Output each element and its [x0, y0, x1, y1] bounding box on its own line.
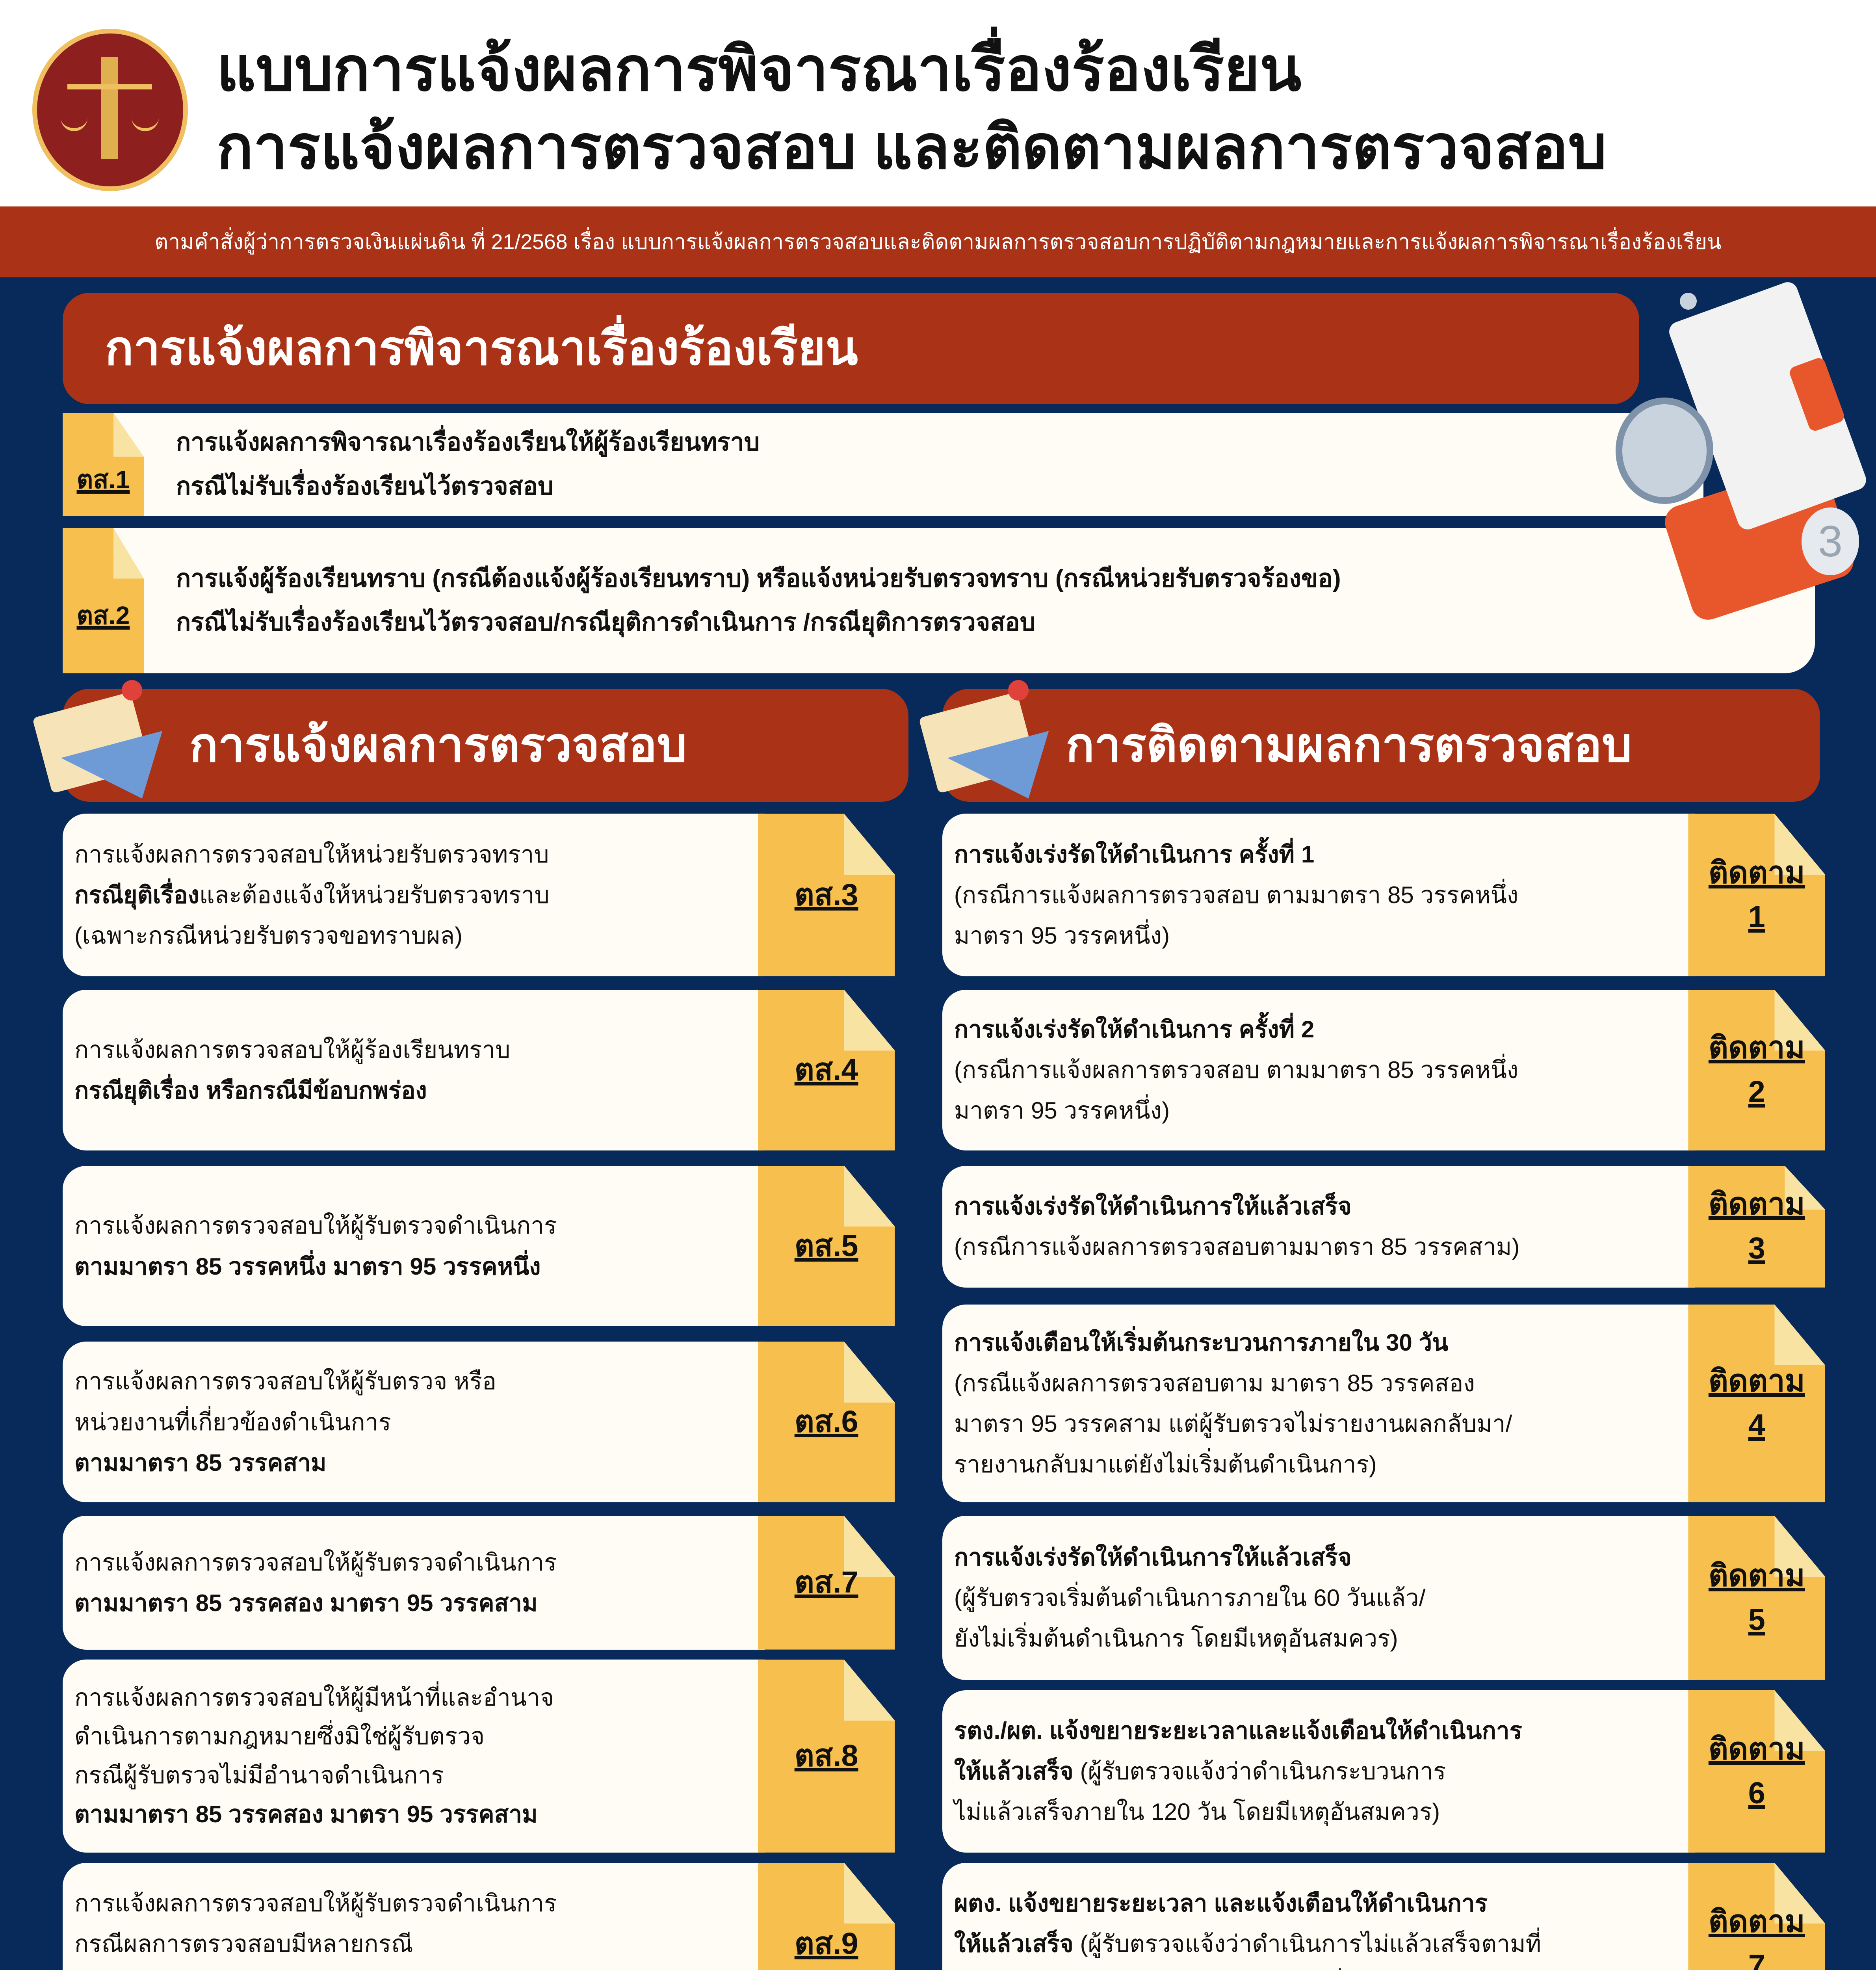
row: ติดตาม 2 [942, 990, 1825, 1150]
row: ตส.2 [63, 528, 1815, 673]
row: ตส.6 [63, 1342, 895, 1502]
panel: left list ตส.3-12 [63, 814, 895, 1970]
row: ติดตาม 4: การแจ้งเตือนให้เริ่มต้นกระบวนการภายใน 30 วัน [954, 1329, 1448, 1356]
row: ติดตาม 2: 2 [1748, 1075, 1765, 1109]
header: white title area [0, 0, 1876, 206]
panel: right list ติดตาม 1-10 [942, 814, 1825, 1970]
row: ตส.8: กรณีผู้รับตรวจไม่มีอำนาจดำเนินการ [74, 1762, 444, 1788]
row: ตส.1: การแจ้งผลการพิจารณาเรื่องร้องเรียนให้ผู้ร้องเรียนทราบ [176, 429, 760, 456]
panel: complaint result notification [63, 293, 1815, 673]
row: ติดตาม 1: การแจ้งเร่งรัดให้ดำเนินการ ครั้งที่ 1 [954, 841, 1314, 868]
row: ตส.9: การแจ้งผลการตรวจสอบให้ผู้รับตรวจดำเนินการ [74, 1890, 557, 1916]
row: ติดตาม 6: รตง./ผต. แจ้งขยายระยะเวลาและแจ้งเตือนให้ดำเนินการ [954, 1717, 1522, 1744]
row: ติดตาม 2: ติดตาม [1709, 1031, 1805, 1065]
row: ตส.3: ตส.3 [795, 878, 858, 912]
row: ตส.5: การแจ้งผลการตรวจสอบให้ผู้รับตรวจดำเนินการ [74, 1212, 557, 1239]
icon: envelope right [910, 680, 1049, 799]
row: ตส.7: ตามมาตรา 85 วรรคสอง มาตรา 95 วรรคสาม [74, 1590, 538, 1616]
icon: megaphone and documents illustration: 3 [1818, 517, 1843, 566]
row: ตส.6: ตามมาตรา 85 วรรคสาม [74, 1450, 327, 1476]
row: ตส.3: การแจ้งผลการตรวจสอบให้หน่วยรับตรวจทราบ [74, 841, 549, 868]
row: ตส.4: ตส.4 [795, 1053, 858, 1087]
row: ติดตาม 1: 1 [1748, 900, 1765, 934]
row: ตส.9 [63, 1863, 895, 1970]
row: ติดตาม 3: 3 [1748, 1231, 1765, 1265]
row: ตส.6: หน่วยงานที่เกี่ยวข้องดำเนินการ [74, 1409, 391, 1435]
row: ตส.3: กรณียุติเรื่องและต้องแจ้งให้หน่วยรับตรวจทราบ [74, 882, 550, 908]
row: ตส.5: ตส.5 [795, 1229, 858, 1263]
row: ตส.5: ตามมาตรา 85 วรรคหนึ่ง มาตรา 95 วรรคหนึ่ง [74, 1253, 541, 1280]
row: ติดตาม 1: (กรณีการแจ้งผลการตรวจสอบ ตามมาตรา 85 วรรคหนึ่ง [954, 882, 1518, 908]
row: ติดตาม 5: (ผู้รับตรวจเริ่มต้นดำเนินการภายใน 60 วันแล้ว/ [954, 1585, 1425, 1611]
row: ติดตาม 5 [942, 1516, 1825, 1680]
row: ติดตาม 7: ติดตาม [1709, 1905, 1805, 1938]
row: ตส.3: (เฉพาะกรณีหน่วยรับตรวจขอทราบผล) [74, 922, 462, 949]
row: ตส.2: กรณีไม่รับเรื่องร้องเรียนไว้ตรวจสอบ/กรณียุติการดำเนินการ /กรณียุติการตรวจสอบ [176, 609, 1035, 636]
row: ติดตาม 3: ติดตาม [1709, 1187, 1805, 1221]
row: ติดตาม 2: มาตรา 95 วรรคหนึ่ง) [954, 1097, 1170, 1124]
row: ติดตาม 6: ติดตาม [1709, 1732, 1805, 1766]
row: ติดตาม 3 [942, 1166, 1825, 1288]
row: ติดตาม 6: 6 [1748, 1776, 1765, 1810]
row: ติดตาม 6 [942, 1690, 1825, 1853]
row: ตส.8 [63, 1660, 895, 1853]
row: ติดตาม 3: การแจ้งเร่งรัดให้ดำเนินการให้แล้วเสร็จ [954, 1193, 1352, 1219]
row: ติดตาม 4: มาตรา 95 วรรคสาม แต่ผู้รับตรวจไม่รายงานผลกลับมา/ [954, 1411, 1512, 1437]
row: ติดตาม 4: รายงานกลับมาแต่ยังไม่เริ่มต้นดำเนินการ) [954, 1451, 1377, 1478]
row: ติดตาม 4: ติดตาม [1709, 1364, 1805, 1398]
row: ตส.4 [63, 990, 895, 1150]
row: ติดตาม 1: ติดตาม [1709, 856, 1805, 890]
row: ตส.3 [63, 814, 895, 976]
heading: follow-up: การติดตามผลการตรวจสอบ [1066, 719, 1632, 771]
row: ติดตาม 6: ไม่แล้วเสร็จภายใน 120 วัน โดยมีเหตุอันสมควร) [954, 1799, 1440, 1825]
row: ติดตาม 1 [942, 814, 1825, 976]
row: ติดตาม 2: (กรณีการแจ้งผลการตรวจสอบ ตามมาตรา 85 วรรคหนึ่ง [954, 1057, 1518, 1083]
row: ติดตาม 7 [942, 1863, 1825, 1970]
row: ตส.2: การแจ้งผู้ร้องเรียนทราบ (กรณีต้องแจ้งผู้ร้องเรียนทราบ) หรือแจ้งหน่วยรับตรวจทราบ (กรณีหน่วยรับตรวจร้องขอ) [176, 565, 1341, 592]
row: ตส.8: การแจ้งผลการตรวจสอบให้ผู้มีหน้าที่และอำนาจ [74, 1684, 554, 1711]
row: ตส.8: ตส.8 [795, 1739, 858, 1773]
row: ตส.7: การแจ้งผลการตรวจสอบให้ผู้รับตรวจดำเนินการ [74, 1549, 557, 1576]
row: ติดตาม 1: มาตรา 95 วรรคหนึ่ง) [954, 922, 1170, 949]
row: ติดตาม 5: ยังไม่เริ่มต้นดำเนินการ โดยมีเหตุอันสมควร) [954, 1625, 1398, 1652]
row: ติดตาม 4: 4 [1748, 1408, 1765, 1442]
row: ตส.1: กรณีไม่รับเรื่องร้องเรียนไว้ตรวจสอบ [176, 473, 554, 500]
heading: follow-up [942, 689, 1820, 802]
row: ติดตาม 4 [942, 1305, 1825, 1502]
row: ตส.6: การแจ้งผลการตรวจสอบให้ผู้รับตรวจ หรือ [74, 1368, 496, 1394]
icon: agency logo seal [32, 29, 188, 191]
row: ตส.5 [63, 1166, 895, 1326]
row: ติดตาม 6: ให้แล้วเสร็จ (ผู้รับตรวจแจ้งว่าดำเนินกระบวนการ [954, 1758, 1446, 1784]
row: ตส.9: ตส.9 [795, 1927, 858, 1961]
row: ตส.8: ดำเนินการตามกฎหมายซึ่งมิใช่ผู้รับตรวจ [74, 1723, 485, 1749]
row: ติดตาม 5: ติดตาม [1709, 1559, 1805, 1593]
heading: inspection result notification [63, 689, 908, 802]
row: ติดตาม 7: ผตง. แจ้งขยายระยะเวลา และแจ้งเตือนให้ดำเนินการ [954, 1890, 1488, 1916]
icon: envelope left [24, 680, 162, 799]
row: ตส.7: ตส.7 [795, 1565, 858, 1599]
row: ตส.1 [63, 413, 1703, 516]
subtitle band [0, 206, 1876, 277]
subtitle band: ตามคำสั่งผู้ว่าการตรวจเงินแผ่นดิน ที่ 21/2568 เรื่อง แบบการแจ้งผลการตรวจสอบและติดตามผลการตรวจสอบการปฏิบัติตามกฎหมายและการแจ้งผลการพิจารณาเรื่องร้องเรียน [154, 230, 1722, 254]
row: ติดตาม 5: การแจ้งเร่งรัดให้ดำเนินการให้แล้วเสร็จ [954, 1544, 1352, 1570]
row: ติดตาม 4: (กรณีแจ้งผลการตรวจสอบตาม มาตรา 85 วรรคสอง [954, 1370, 1475, 1396]
row: ตส.1: ตส.1 [76, 465, 130, 493]
row: ติดตาม 7: ให้แล้วเสร็จ (ผู้รับตรวจแจ้งว่าดำเนินการไม่แล้วเสร็จตามที่ [954, 1931, 1541, 1957]
row: ตส.7 [63, 1516, 895, 1650]
row: ตส.9: กรณีผลการตรวจสอบมีหลายกรณี [74, 1931, 413, 1957]
row: ติดตาม 3: (กรณีการแจ้งผลการตรวจสอบตามมาตรา 85 วรรคสาม) [954, 1234, 1519, 1260]
row: ตส.4: การแจ้งผลการตรวจสอบให้ผู้ร้องเรียนทราบ [74, 1037, 510, 1063]
row: ติดตาม 5: 5 [1748, 1603, 1765, 1637]
heading: complaint section [63, 293, 1639, 404]
title: การแจ้งผลการตรวจสอบ และติดตามผลการตรวจสอบ [217, 113, 1607, 181]
row: ตส.2: ตส.2 [76, 601, 130, 630]
row: ตส.6: ตส.6 [795, 1405, 858, 1438]
row: ตส.4: กรณียุติเรื่อง หรือกรณีมีข้อบกพร่อง [74, 1077, 427, 1104]
title [217, 30, 1607, 186]
heading: complaint section: การแจ้งผลการพิจารณาเรื่องร้องเรียน [105, 322, 858, 375]
title: แบบการแจ้งผลการพิจารณาเรื่องร้องเรียน [217, 35, 1301, 103]
icon: megaphone and documents illustration [1582, 279, 1872, 609]
row: ติดตาม 2: การแจ้งเร่งรัดให้ดำเนินการ ครั้งที่ 2 [954, 1016, 1314, 1043]
heading: inspection result notification: การแจ้งผลการตรวจสอบ [189, 719, 687, 771]
row: ตส.8: ตามมาตรา 85 วรรคสอง มาตรา 95 วรรคสาม [74, 1801, 538, 1827]
